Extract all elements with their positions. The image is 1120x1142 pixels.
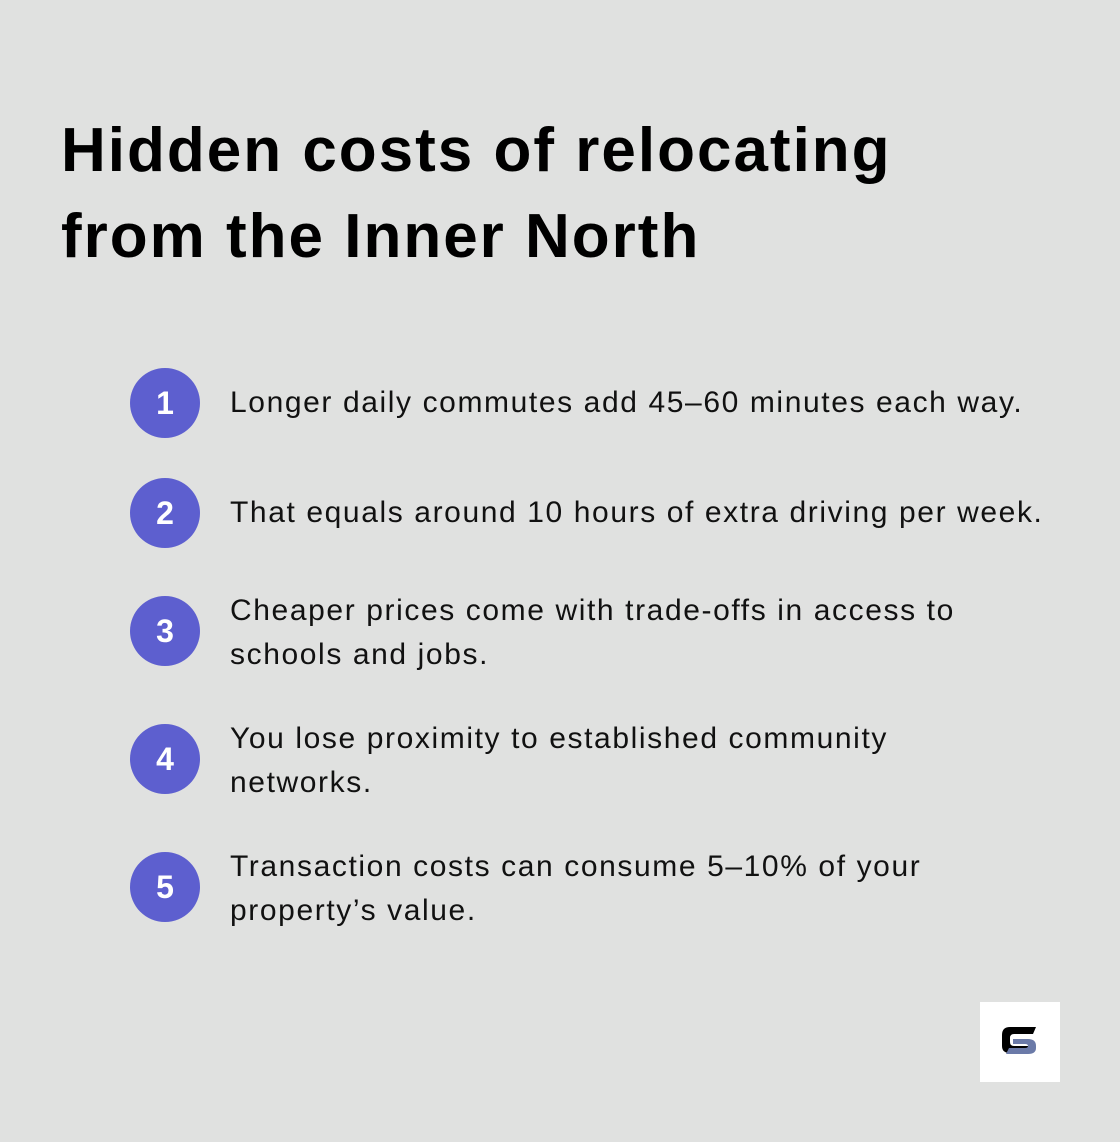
item 3 <box>130 594 955 671</box>
item 3: Cheaper prices come with trade-offs in access to <box>230 594 955 627</box>
item 1: Longer daily commutes add 45–60 minutes each way. <box>230 386 1023 419</box>
title <box>61 116 892 271</box>
item 4: 4 <box>156 741 174 777</box>
item 4: You lose proximity to established community <box>230 722 888 755</box>
item 4: networks. <box>230 766 373 799</box>
item 3: 3 <box>156 613 174 649</box>
item 5: Transaction costs can consume 5–10% of your <box>230 850 921 883</box>
item 3: schools and jobs. <box>230 638 489 671</box>
logo <box>980 1002 1060 1082</box>
item 1: 1 <box>156 385 174 421</box>
item 5: property’s value. <box>230 894 477 927</box>
item 5: 5 <box>156 869 174 905</box>
item 2 <box>130 478 1044 548</box>
item 4 <box>130 722 888 799</box>
title: from the Inner North <box>61 202 700 271</box>
item 2: 2 <box>156 495 174 531</box>
title: Hidden costs of relocating <box>61 116 892 185</box>
item 1 <box>130 368 1023 438</box>
item 2: That equals around 10 hours of extra driving per week. <box>230 496 1044 529</box>
item 5 <box>130 850 921 927</box>
